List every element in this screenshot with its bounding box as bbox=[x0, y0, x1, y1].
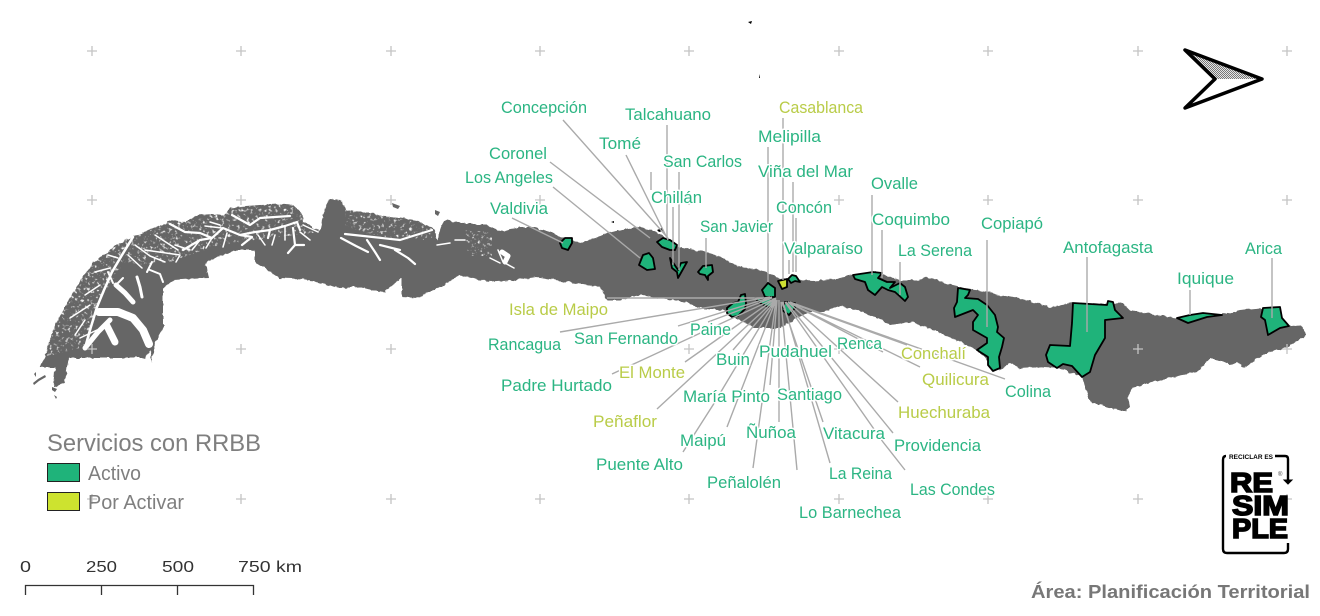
logo: Reciclar es Resimple: RE bbox=[1230, 467, 1273, 498]
label: Talcahuano: Talcahuano bbox=[625, 105, 711, 124]
label: Colina: Colina bbox=[1005, 382, 1052, 401]
label: Peñaflor: Peñaflor bbox=[593, 412, 657, 431]
label: Valparaíso: Valparaíso bbox=[784, 239, 863, 258]
fjords and channels bbox=[70, 215, 514, 348]
label: Puente Alto: Puente Alto bbox=[596, 455, 683, 474]
label: Peñalolén: Peñalolén bbox=[707, 473, 781, 492]
scale bar bbox=[20, 559, 302, 595]
label: Pudahuel: Pudahuel bbox=[759, 342, 832, 361]
area: Copiapo bbox=[954, 288, 1004, 371]
scale label 0: 0 bbox=[20, 559, 31, 576]
area: Santiago west bbox=[755, 298, 776, 308]
speckled archipelago bbox=[36, 203, 492, 358]
label: Quilicura: Quilicura bbox=[922, 370, 990, 389]
area: Valparaiso bbox=[788, 275, 800, 283]
area: Iquique bbox=[1177, 313, 1222, 323]
area: Santiago bbox=[782, 302, 795, 315]
labels bbox=[465, 98, 1283, 522]
legend title: Servicios con RRBB bbox=[47, 430, 261, 457]
area: Chillan and Concepcion cluster bbox=[657, 238, 677, 250]
islands bbox=[33, 203, 440, 399]
label: Las Condes: Las Condes bbox=[910, 480, 995, 499]
label: Coquimbo: Coquimbo bbox=[872, 210, 950, 229]
label: Chillán: Chillán bbox=[651, 188, 702, 207]
label: Casablanca: Casablanca bbox=[779, 98, 864, 117]
label: Ovalle: Ovalle bbox=[871, 174, 918, 193]
label: Los Angeles: Los Angeles bbox=[465, 168, 553, 187]
area: Valdivia bbox=[560, 238, 572, 250]
leader lines bbox=[512, 118, 1272, 470]
legend text: Por Activar: Por Activar bbox=[88, 492, 184, 514]
area credit: Área: Planificación Territorial bbox=[1031, 581, 1310, 602]
label: Isla de Maipo: Isla de Maipo bbox=[509, 300, 608, 319]
map: Chile territory bbox=[33, 199, 1307, 412]
label: Providencia: Providencia bbox=[894, 436, 982, 455]
label: El Monte: El Monte bbox=[619, 363, 685, 382]
label: Rancagua: Rancagua bbox=[488, 335, 562, 354]
label: Santiago: Santiago bbox=[777, 385, 842, 404]
legend swatch: Por Activar bbox=[48, 492, 80, 510]
logo: Reciclar es Resimple: PLE bbox=[1232, 513, 1288, 544]
label: La Reina: La Reina bbox=[829, 464, 892, 483]
label: Vitacura: Vitacura bbox=[823, 424, 886, 443]
area: San Carlos bbox=[670, 258, 687, 278]
label: Ñuñoa: Ñuñoa bbox=[746, 423, 797, 442]
label: Lo Barnechea: Lo Barnechea bbox=[799, 503, 902, 522]
area: Casablanca bbox=[778, 279, 787, 289]
area: Los Angeles bbox=[639, 253, 655, 270]
label: Buin: Buin bbox=[716, 350, 750, 369]
legend bbox=[47, 430, 261, 514]
label: Copiapó: Copiapó bbox=[981, 214, 1043, 233]
area: Melipilla bbox=[762, 283, 775, 297]
graticule crosses bbox=[87, 46, 1292, 504]
area: San Javier bbox=[698, 265, 713, 280]
label: Renca: Renca bbox=[837, 334, 882, 353]
label: Coronel: Coronel bbox=[489, 144, 547, 163]
label: San Fernando: San Fernando bbox=[574, 329, 678, 348]
icon: north arrow bbox=[1185, 50, 1262, 108]
area: Arica bbox=[1261, 307, 1289, 335]
service areas bbox=[560, 238, 1289, 377]
logo: Reciclar es Resimple: ® bbox=[1278, 471, 1283, 478]
label: San Carlos: San Carlos bbox=[663, 152, 742, 171]
scale label 750 km: 750 km bbox=[238, 559, 302, 576]
label: Melipilla: Melipilla bbox=[758, 127, 822, 146]
label: Padre Hurtado: Padre Hurtado bbox=[501, 376, 612, 395]
label: María Pinto: María Pinto bbox=[683, 387, 770, 406]
label: Maipú: Maipú bbox=[680, 431, 726, 450]
label: Huechuraba: Huechuraba bbox=[898, 403, 991, 422]
area: Rancagua bbox=[727, 294, 746, 317]
area: Antofagasta bbox=[1046, 301, 1123, 377]
legend swatch: Activo bbox=[48, 464, 80, 482]
scale label 500: 500 bbox=[162, 559, 194, 576]
label: Antofagasta: Antofagasta bbox=[1063, 238, 1154, 257]
logo: Reciclar es Resimple: RECICLAR ES bbox=[1229, 454, 1274, 461]
label: Tomé: Tomé bbox=[599, 134, 641, 153]
scale label 250: 250 bbox=[86, 559, 117, 576]
logo: Reciclar es Resimple: SIM bbox=[1232, 490, 1289, 521]
label: Paine: Paine bbox=[690, 320, 731, 339]
label: Conchalí: Conchalí bbox=[901, 344, 966, 363]
small black islets bbox=[611, 21, 760, 232]
label: Concepción: Concepción bbox=[501, 98, 587, 117]
label: Viña del Mar: Viña del Mar bbox=[758, 162, 853, 181]
label: Valdivia: Valdivia bbox=[490, 199, 549, 218]
label: Concón: Concón bbox=[776, 198, 832, 217]
label: Iquique: Iquique bbox=[1177, 269, 1234, 288]
area: Ovalle, Coquimbo, La Serena bbox=[853, 272, 908, 301]
label: La Serena: La Serena bbox=[898, 241, 973, 260]
label: Arica: Arica bbox=[1245, 239, 1283, 258]
legend text: Activo: Activo bbox=[88, 463, 141, 485]
label: San Javier: San Javier bbox=[700, 217, 773, 236]
logo: Reciclar es Resimple bbox=[1223, 454, 1292, 553]
